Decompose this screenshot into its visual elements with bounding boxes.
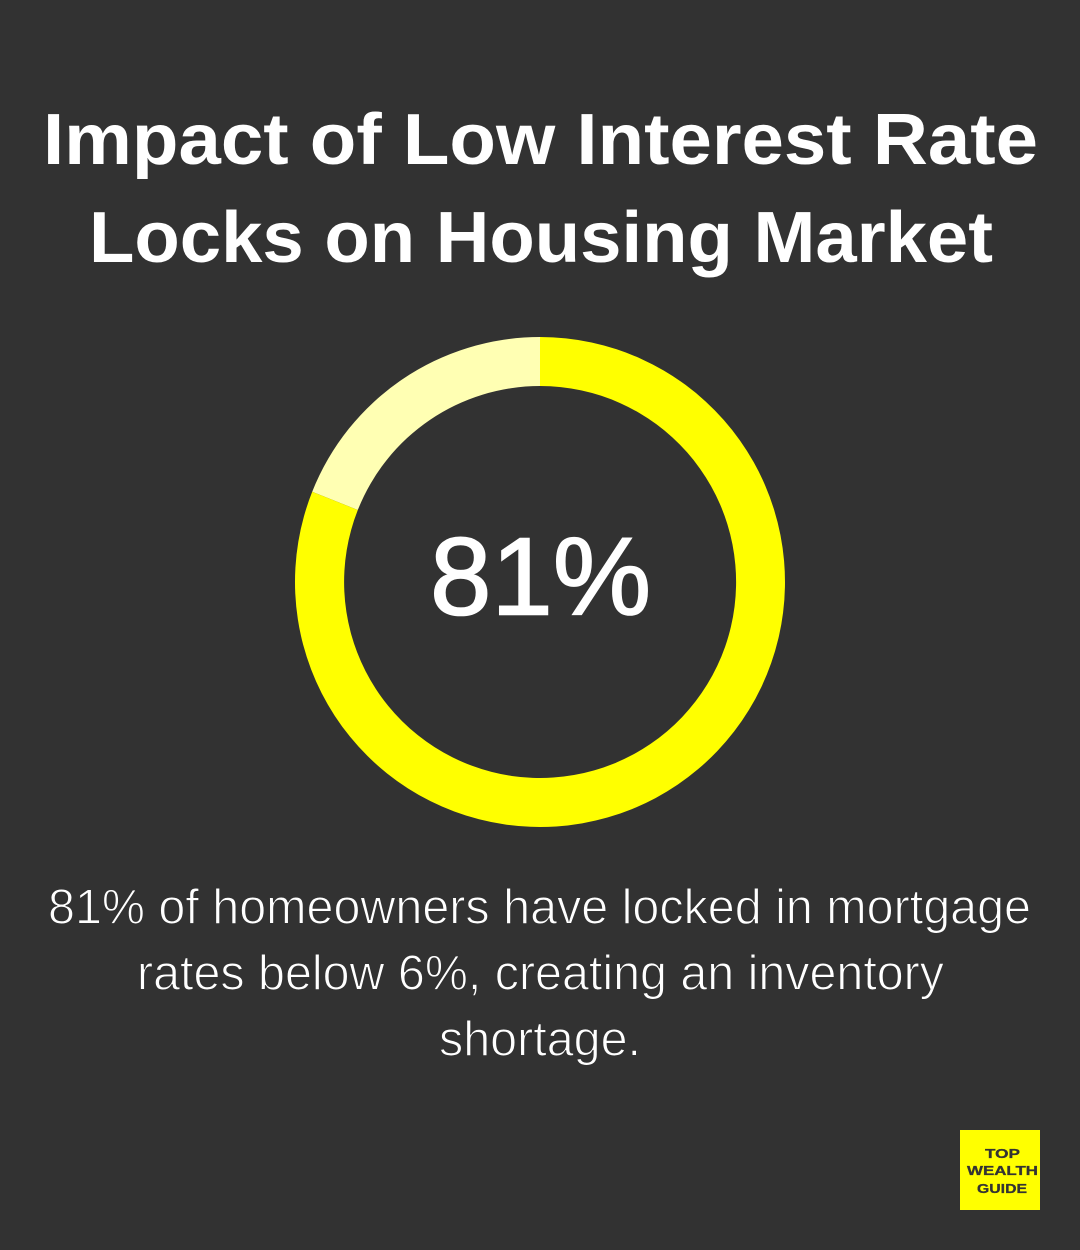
description text: shortage. [439,1012,641,1066]
donut segment: 81% [295,337,785,827]
description text [48,880,1031,1066]
description text: 81% of homeowners have locked in mortgage [48,880,1031,934]
donut segment: remaining 19% [312,337,540,510]
logo: Top Wealth Guide: TOP [985,1146,1020,1161]
donut chart: 81% [295,337,785,827]
logo: Top Wealth Guide: WEALTH [967,1163,1038,1178]
title: Locks on Housing Market [89,198,993,278]
title [43,100,1038,278]
donut center value: 81% [430,516,651,638]
logo: Top Wealth Guide: GUIDE [977,1181,1027,1196]
title: Impact of Low Interest Rate [43,100,1038,180]
logo: Top Wealth Guide [960,1130,1040,1210]
description text: rates below 6%, creating an inventory [137,946,944,1000]
